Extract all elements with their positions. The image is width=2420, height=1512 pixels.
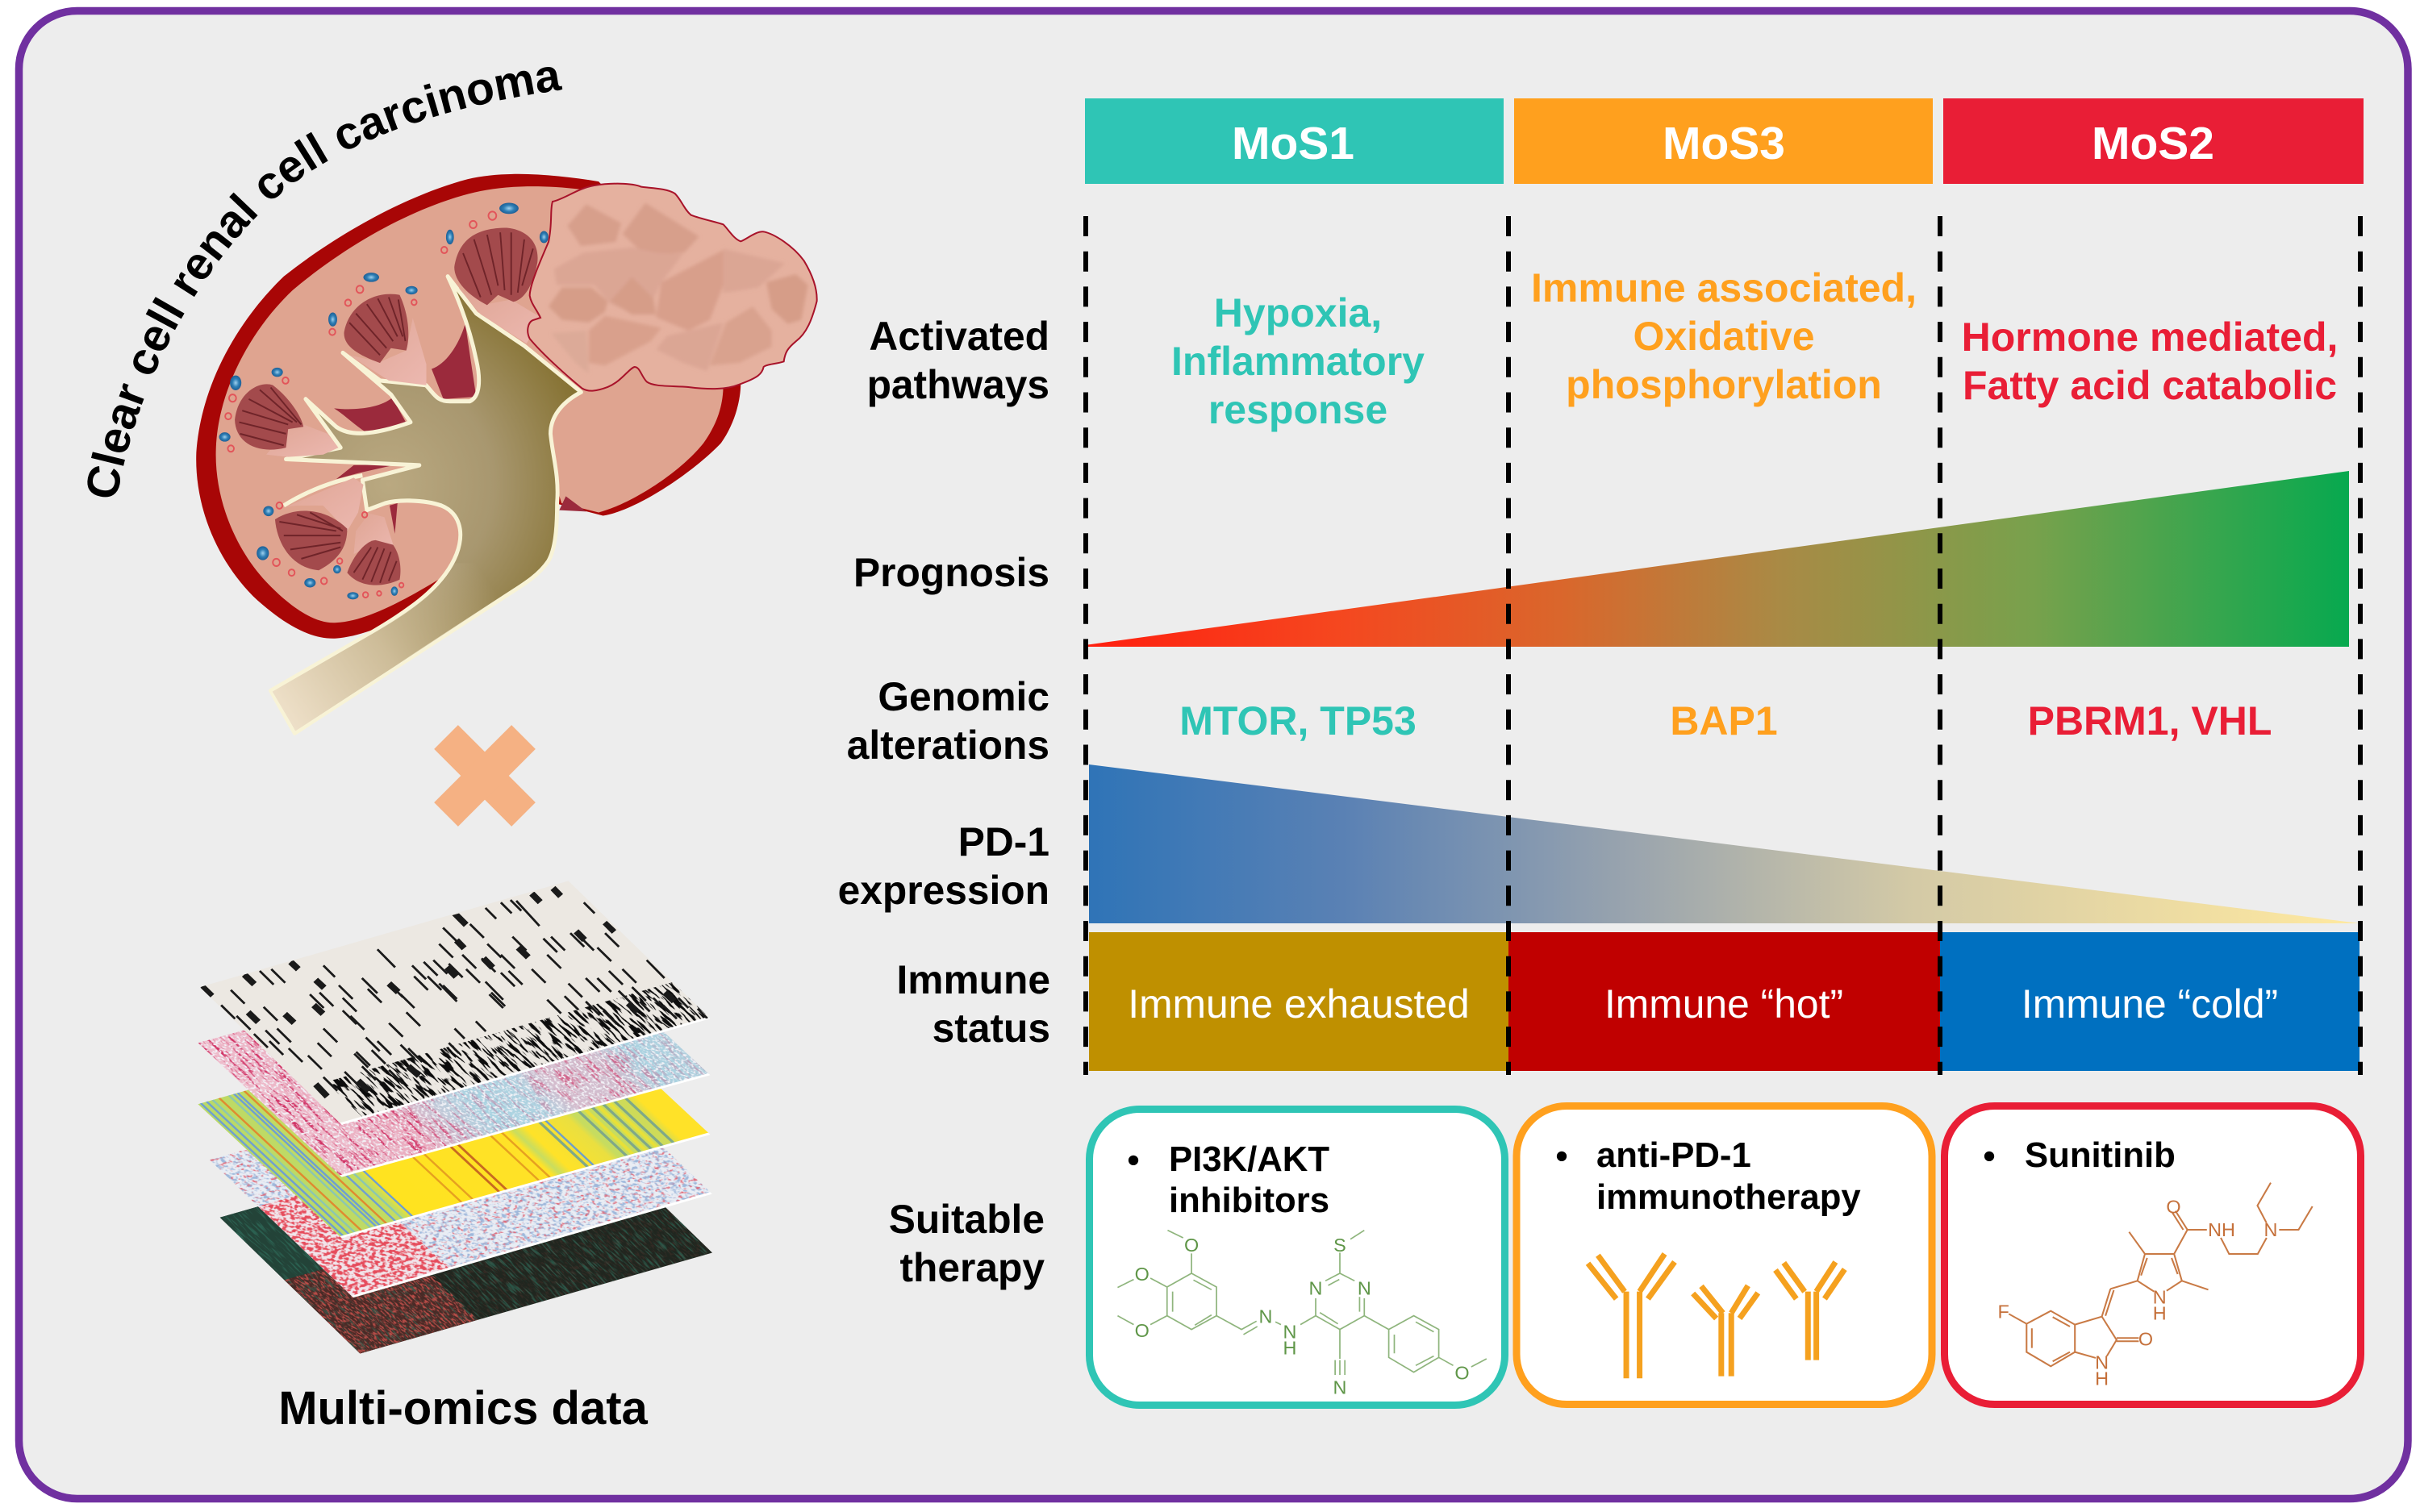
therapy card: PI3K/AKT inhibitors: •: [1127, 1141, 1140, 1180]
icon: kinase inhibitor molecule: H: [1283, 1338, 1296, 1358]
icon: antibodies: [1588, 1254, 1845, 1378]
header: MoS3: [1514, 98, 1933, 184]
therapy card: PI3K/AKT inhibitors: [1089, 1110, 1505, 1405]
therapy card: PI3K/AKT inhibitors: PI3K/AKT: [1169, 1139, 1329, 1179]
therapy card: anti-PD-1 immunotherapy: [1517, 1106, 1932, 1405]
header: MoS1: MoS1: [1232, 118, 1354, 169]
therapy card: anti-PD-1 immunotherapy: anti-PD-1: [1596, 1135, 1751, 1175]
label: PD-1 expression: expression: [838, 868, 1049, 913]
icon: sunitinib molecule: H: [2095, 1368, 2109, 1389]
prognosis wedge: [1085, 471, 2349, 647]
therapy card: Sunitinib: Sunitinib: [2025, 1135, 2176, 1175]
label: suitable therapy: Suitable: [889, 1197, 1045, 1242]
pathways: MoS2: Fatty acid catabolic: [1963, 363, 2337, 408]
pathways: MoS3: Immune associated,: [1531, 265, 1917, 310]
pathways: MoS1: Hypoxia,: [1214, 290, 1382, 335]
header: MoS3: MoS3: [1663, 118, 1785, 169]
icon: sunitinib molecule: O: [2166, 1197, 2181, 1218]
icon: kinase inhibitor molecule: N: [1333, 1377, 1346, 1398]
icon: tumor mass: [528, 184, 817, 391]
label: genomic alterations: alterations: [847, 723, 1049, 768]
immune status: exhausted: Immune exhausted: [1128, 981, 1470, 1027]
icon: sunitinib molecule: N: [2264, 1219, 2277, 1240]
icon: kinase inhibitor molecule: O: [1184, 1235, 1199, 1256]
header: MoS2: [1943, 98, 2364, 184]
icon: sunitinib molecule: N: [2153, 1287, 2167, 1307]
icon: sunitinib molecule: [1998, 1183, 2313, 1389]
icon: kidney with tumor: [196, 174, 817, 733]
header: MoS1: [1085, 98, 1504, 184]
icon: kinase inhibitor molecule: N: [1358, 1278, 1371, 1298]
header: MoS2: MoS2: [2092, 118, 2214, 169]
pathways: MoS3: phosphorylation: [1566, 362, 1882, 407]
icon: sunitinib molecule: N: [2095, 1352, 2109, 1372]
icon: multiplication cross: [446, 737, 524, 814]
therapy card: Sunitinib: [1944, 1106, 2360, 1405]
immune status: hot: [1508, 932, 1940, 1071]
label: PD-1 expression: PD-1: [958, 819, 1049, 864]
layer: striped yellow heatmap: [198, 1001, 709, 1237]
heading: multi-omics data: Multi-omics data: [278, 1382, 649, 1435]
immune status: hot: Immune “hot”: [1604, 981, 1843, 1027]
icon: kinase inhibitor molecule: O: [1454, 1363, 1470, 1384]
PD-1 expression wedge: [1089, 764, 2360, 923]
icon: kinase inhibitor molecule: N: [1309, 1278, 1322, 1298]
icon: sunitinib molecule: F: [1998, 1302, 2009, 1322]
icon: kinase inhibitor molecule: S: [1333, 1235, 1346, 1256]
title: clear cell renal cell carcinoma: Clear cell renal cell carcinoma: [87, 67, 563, 497]
therapy card: Sunitinib: •: [1983, 1137, 1996, 1176]
icon: kinase inhibitor molecule: [1117, 1231, 1487, 1398]
immune status: exhausted: [1089, 932, 1508, 1071]
immune status: cold: [1940, 932, 2360, 1071]
label: activated pathways: pathways: [867, 362, 1049, 407]
genomic: MoS2: PBRM1, VHL: [2028, 698, 2272, 744]
icon: kinase inhibitor molecule: O: [1135, 1320, 1150, 1341]
pathways: MoS2: Hormone mediated,: [1962, 314, 2338, 360]
therapy card: anti-PD-1 immunotherapy: immunotherapy: [1596, 1177, 1861, 1217]
multi-omics layered heatmaps: [198, 881, 712, 1353]
dashed column separators: [1086, 216, 2360, 1075]
row labels: [838, 314, 1050, 1290]
label: immune status: status: [933, 1006, 1050, 1051]
icon: kinase inhibitor molecule: O: [1135, 1264, 1150, 1285]
therapy card: anti-PD-1 immunotherapy: •: [1555, 1137, 1568, 1176]
pathways: MoS1: Inflammatory: [1171, 339, 1425, 384]
icon: kinase inhibitor molecule: N: [1283, 1322, 1296, 1342]
immune status: cold: Immune “cold”: [2022, 981, 2278, 1027]
layer: mutation matrix: [200, 881, 709, 1124]
genomic: MoS3: BAP1: [1670, 698, 1778, 744]
label: suitable therapy: therapy: [900, 1245, 1045, 1290]
pathways: MoS3: Oxidative: [1633, 314, 1815, 359]
icon: sunitinib molecule: H: [2153, 1303, 2167, 1323]
label: prognosis: Prognosis: [853, 550, 1049, 595]
label: immune status: Immune: [896, 957, 1050, 1002]
layer: expression heatmap dark: [220, 1117, 712, 1353]
layer: pink and blue heatmap: [198, 1031, 710, 1177]
icon: kinase inhibitor molecule: N: [1259, 1306, 1272, 1327]
icon: sunitinib molecule: O: [2138, 1329, 2153, 1350]
label: genomic alterations: Genomic: [878, 674, 1049, 719]
layer: speckled heatmap: [210, 1056, 711, 1297]
therapy card: PI3K/AKT inhibitors: inhibitors: [1169, 1181, 1329, 1220]
label: activated pathways: Activated: [869, 314, 1049, 359]
genomic: MoS1: MTOR, TP53: [1179, 698, 1417, 744]
pathways: MoS1: response: [1208, 387, 1387, 432]
icon: sunitinib molecule: NH: [2208, 1219, 2235, 1240]
